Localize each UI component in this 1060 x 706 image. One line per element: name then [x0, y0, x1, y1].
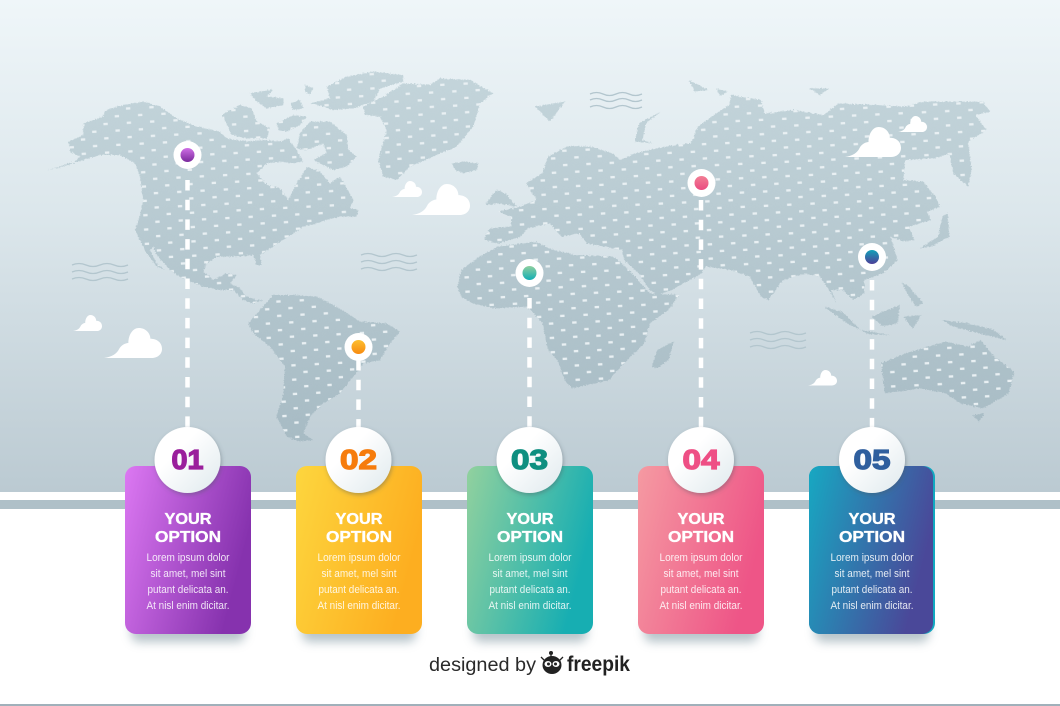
number badge [154, 427, 220, 493]
card 02: At nisl enim dicitar. [318, 600, 400, 612]
card 02: sit amet, mel sint [322, 568, 396, 580]
card 01: OPTION [155, 529, 221, 546]
dashed connector lines [188, 180, 872, 432]
card 05: At nisl enim dicitar. [830, 600, 914, 612]
North America [47, 102, 358, 303]
pin 1: North America [174, 141, 202, 169]
card body [638, 466, 764, 634]
cloud: large Pacific [104, 328, 162, 358]
footer credit: designed by [429, 654, 536, 676]
wave marks: Atlantic [361, 254, 417, 270]
card shadow [644, 618, 758, 642]
card 04: putant delicata an. [660, 584, 742, 596]
footer credit [429, 651, 630, 676]
heading: YOUR [164, 511, 212, 528]
heading: YOUR [506, 511, 554, 528]
card 02 [296, 427, 422, 642]
pin 4: Russia [688, 169, 716, 197]
body text: Lorem ipsum dolor [318, 552, 401, 564]
lower white floor [0, 509, 1060, 704]
cloud: small Indian Ocean [808, 370, 837, 386]
Arctic islands [222, 72, 403, 170]
wave marks: Arctic [590, 92, 642, 108]
card shadow [473, 618, 587, 642]
card 03: At nisl enim dicitar. [488, 600, 572, 612]
card 03: OPTION [497, 529, 563, 546]
pin 2: South America [344, 333, 372, 361]
Greenland [363, 78, 493, 180]
number badge: 04 [682, 444, 720, 475]
card 04: OPTION [668, 529, 734, 546]
card body [467, 466, 593, 634]
South America [248, 295, 400, 442]
card 01 [125, 427, 251, 642]
islands [452, 80, 1007, 422]
number badge [496, 427, 562, 493]
card 05: OPTION [839, 529, 905, 546]
card 05: sit amet, mel sint [834, 568, 910, 580]
heading: YOUR [336, 511, 382, 528]
clouds [73, 116, 927, 386]
card 05 [809, 427, 935, 642]
icon: freepik mascot [541, 651, 563, 674]
body text: Lorem ipsum dolor [830, 552, 914, 564]
card shadow [302, 618, 416, 642]
world map: Americas and Greenland [47, 72, 493, 442]
white horizon band [0, 492, 1060, 500]
number badge [839, 427, 905, 493]
number badge: 05 [854, 444, 890, 475]
bottom edge line [0, 704, 1060, 706]
cloud: small Pacific [73, 315, 102, 331]
wave marks: Indian Ocean [750, 332, 806, 348]
cloud: large Atlantic [412, 184, 470, 215]
pin 5: China [858, 243, 886, 271]
card 03 [467, 427, 593, 642]
card body [809, 466, 935, 634]
number badge [326, 427, 392, 493]
cloud: small Atlantic [392, 181, 422, 197]
Iceland [452, 162, 478, 173]
footer credit: freepik [567, 653, 630, 676]
map dash pattern: Americas and Greenland [47, 72, 493, 442]
card 02: putant delicata an. [318, 584, 400, 596]
body text: Lorem ipsum dolor [488, 552, 572, 564]
heading: YOUR [848, 511, 896, 528]
Australia [881, 340, 1014, 408]
card body [125, 466, 251, 634]
cloud: small Siberia [898, 116, 927, 132]
card shadow [815, 618, 929, 642]
number badge: 01 [172, 444, 204, 475]
number badge [668, 427, 734, 493]
map dash pattern: Eurasia, Africa and Australia [457, 95, 1014, 408]
number badge: 03 [511, 444, 548, 475]
card shadow [131, 618, 245, 642]
card 01: putant delicata an. [148, 584, 228, 596]
card 02: OPTION [326, 529, 392, 546]
card 04: sit amet, mel sint [664, 568, 738, 580]
grey horizon band [0, 500, 1060, 509]
heading: YOUR [678, 511, 724, 528]
card body [296, 466, 422, 634]
body text: Lorem ipsum dolor [146, 552, 230, 564]
cloud: large Siberia [845, 127, 901, 157]
background sky gradient [0, 0, 1060, 492]
pin 3: Africa [516, 259, 544, 287]
card 01: At nisl enim dicitar. [146, 600, 230, 612]
Eurasia [485, 95, 990, 303]
card 05: putant delicata an. [832, 584, 912, 596]
card 04 [638, 427, 764, 642]
card 01: sit amet, mel sint [150, 568, 226, 580]
card 03: putant delicata an. [490, 584, 570, 596]
card 04: At nisl enim dicitar. [660, 600, 742, 612]
card 03: sit amet, mel sint [492, 568, 568, 580]
wave marks: Pacific [72, 264, 128, 280]
number badge: 02 [340, 444, 377, 475]
body text: Lorem ipsum dolor [660, 552, 743, 564]
Africa [457, 242, 679, 388]
world map: Eurasia, Africa and Australia [452, 80, 1014, 422]
